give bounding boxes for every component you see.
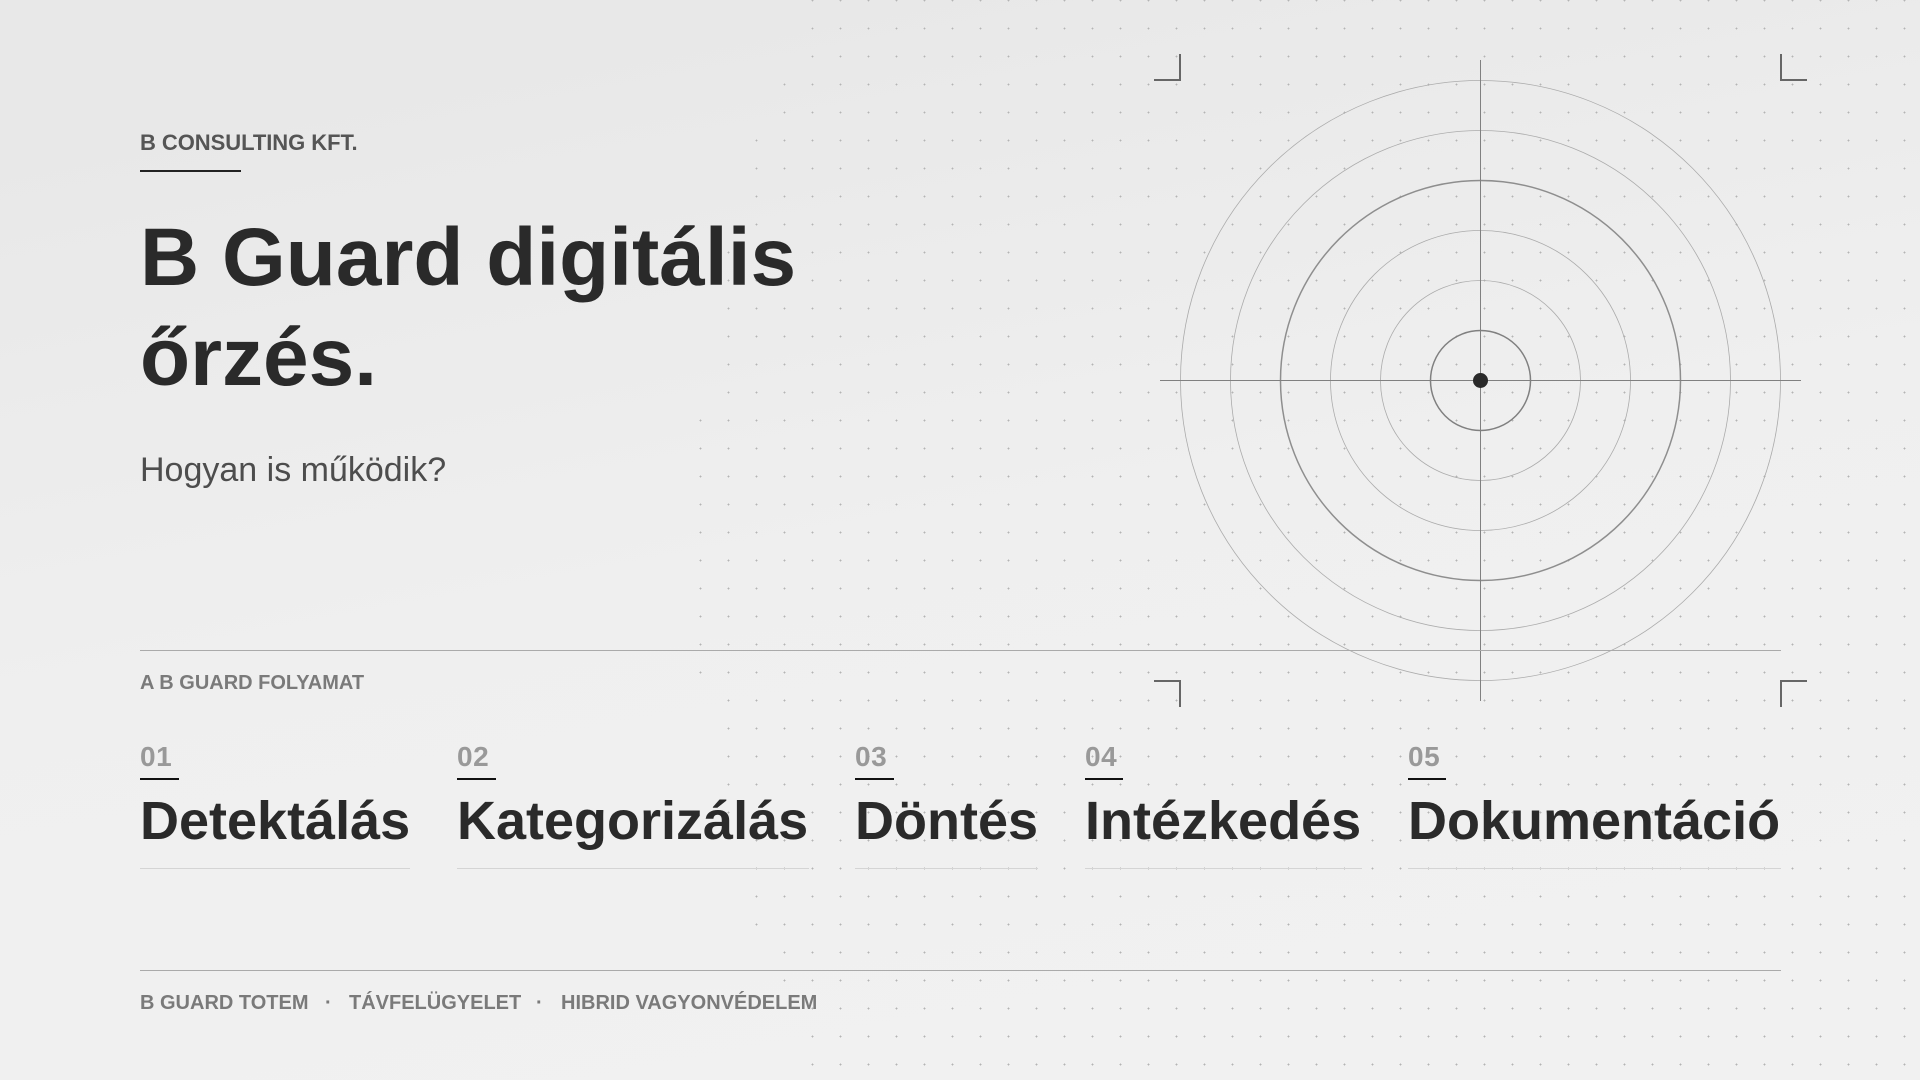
step 03: Döntés: 03 bbox=[855, 741, 887, 772]
company underline bbox=[140, 170, 241, 172]
corner bracket: top right bbox=[1781, 54, 1807, 80]
step 04: Intézkedés: 04 bbox=[1085, 741, 1117, 772]
step 01: Detektálás: 01 bbox=[140, 741, 172, 772]
footer tags: · bbox=[536, 992, 543, 1014]
step 01: Detektálás: Detektálás bbox=[140, 791, 410, 851]
section divider bbox=[140, 650, 1781, 651]
subtitle: Hogyan is működik? bbox=[140, 451, 446, 489]
footer tags bbox=[140, 991, 817, 1014]
corner bracket: bottom left bbox=[1154, 681, 1180, 707]
target diagram bbox=[1160, 60, 1801, 701]
step 04: Intézkedés bbox=[1085, 741, 1362, 869]
footer tags: TÁVFELÜGYELET bbox=[349, 991, 521, 1014]
title: őrzés. bbox=[140, 312, 377, 403]
step 05: Dokumentáció: Dokumentáció bbox=[1408, 791, 1780, 851]
footer tags: HIBRID VAGYONVÉDELEM bbox=[561, 991, 817, 1014]
footer tags: · bbox=[325, 992, 332, 1014]
step 03: Döntés: Döntés bbox=[855, 791, 1038, 851]
footer tags: B GUARD TOTEM bbox=[140, 992, 309, 1014]
company name: B CONSULTING KFT. bbox=[140, 130, 358, 155]
step 02: Kategorizálás: 02 bbox=[457, 741, 489, 772]
step 04: Intézkedés: Intézkedés bbox=[1085, 791, 1361, 851]
step 05: Dokumentáció bbox=[1408, 741, 1781, 869]
corner bracket: top left bbox=[1154, 54, 1180, 80]
title: B Guard digitális bbox=[140, 212, 796, 303]
footer divider bbox=[140, 970, 1781, 971]
corner bracket: bottom right bbox=[1781, 681, 1807, 707]
step 01: Detektálás bbox=[140, 741, 410, 869]
step 02: Kategorizálás bbox=[457, 741, 809, 869]
step 02: Kategorizálás: Kategorizálás bbox=[457, 791, 808, 851]
section label: A B GUARD FOLYAMAT bbox=[140, 672, 364, 694]
step 03: Döntés bbox=[855, 741, 1038, 869]
step 05: Dokumentáció: 05 bbox=[1408, 741, 1440, 772]
